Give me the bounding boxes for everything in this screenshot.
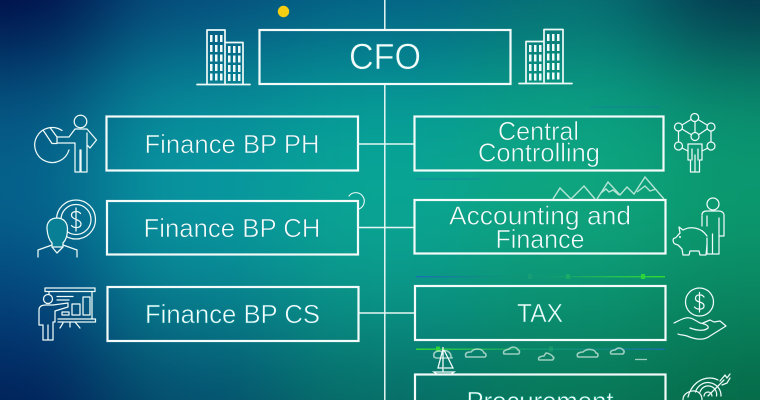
connector lines to the boxes xyxy=(358,144,415,313)
box: Finance BP PH xyxy=(106,116,358,170)
decoration: faint blue lines xyxy=(416,107,660,179)
box: Central Controlling: Controlling xyxy=(478,138,600,168)
decoration: clouds xyxy=(434,347,647,360)
box: Accounting and Finance xyxy=(414,200,666,254)
vertical connector line xyxy=(384,0,386,400)
yellow dot xyxy=(278,6,289,17)
icon: right buildings xyxy=(519,30,572,84)
icon: dollar coin over hand xyxy=(674,288,726,339)
decoration: blue-green line above TAX xyxy=(416,274,665,279)
box: Accounting and Finance: Accounting and xyxy=(449,200,631,230)
icon: target with arrow xyxy=(683,374,730,400)
decoration: green-blue line below TAX xyxy=(416,346,665,352)
icon: presenter at board xyxy=(39,288,96,340)
decoration: mountains xyxy=(553,177,664,199)
box: Central Controlling xyxy=(414,116,664,170)
decoration: sailboat xyxy=(434,347,454,374)
icon: person with dollar coin xyxy=(38,200,96,257)
icon: person with pie chart xyxy=(35,115,96,172)
decoration: small ring xyxy=(349,193,364,209)
box: Finance BP CS: Finance BP CS xyxy=(145,299,320,329)
box: Procurement xyxy=(414,373,667,400)
icon: left buildings xyxy=(197,30,250,84)
box: Finance BP CS xyxy=(108,287,358,341)
box: Central Controlling: Central xyxy=(498,116,579,146)
box: Accounting and Finance: Finance xyxy=(496,224,584,254)
box: CFO: CFO xyxy=(349,36,421,77)
box: Finance BP CH xyxy=(107,201,358,254)
box: CFO xyxy=(260,30,510,84)
box: Finance BP PH: Finance BP PH xyxy=(144,129,320,159)
box: TAX xyxy=(415,286,666,340)
box: Finance BP CH: Finance BP CH xyxy=(144,213,320,243)
box: TAX: TAX xyxy=(517,298,563,328)
icon: piggy bank and person xyxy=(673,198,724,255)
icon: network person xyxy=(674,114,715,172)
